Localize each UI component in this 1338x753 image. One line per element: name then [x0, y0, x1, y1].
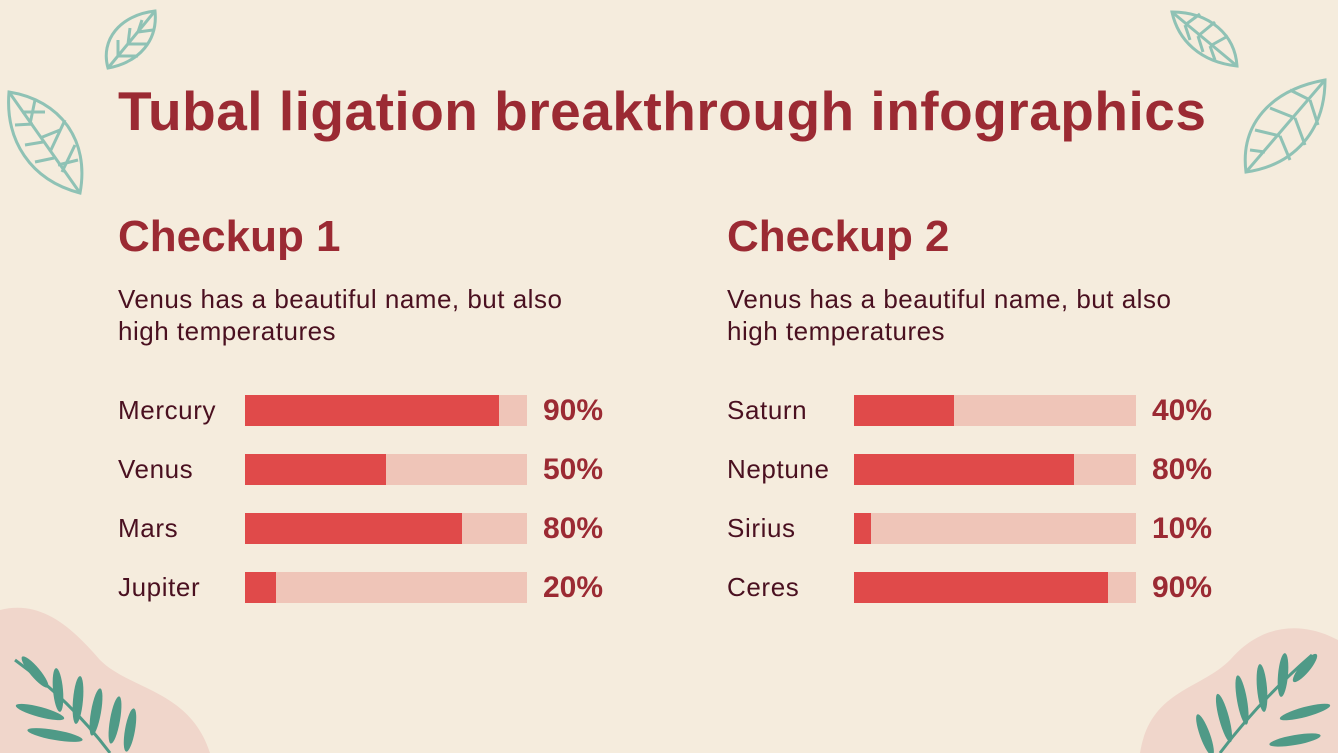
icon: leaf right large [1245, 80, 1325, 172]
panel: checkup 1 [118, 212, 603, 604]
bar: Mars: 80% [543, 512, 603, 545]
bar: Ceres [727, 571, 1212, 604]
description: Venus has a beautiful name, but also high temperatures [727, 284, 1171, 346]
bar: Venus: 50% [543, 453, 603, 486]
bar: Ceres: 90% [1152, 571, 1212, 604]
panel: checkup 2 [727, 212, 1212, 604]
bar: Sirius [727, 512, 1212, 545]
blob bottom right [1140, 628, 1338, 753]
icon: leaf left large [9, 92, 82, 193]
icon: fern bottom left [15, 653, 139, 753]
bar: Jupiter: 20% [543, 571, 603, 604]
heading: Checkup 2 [727, 212, 950, 261]
bar: Saturn: Saturn [727, 395, 807, 425]
bar: Sirius: 10% [1152, 512, 1212, 545]
bar: Jupiter [118, 571, 603, 604]
bar: Neptune: 80% [1152, 453, 1212, 486]
bar: Mercury [118, 394, 603, 427]
bar: Mars: Mars [118, 513, 178, 543]
bar: Jupiter: Jupiter [118, 572, 200, 602]
bar: Mercury: Mercury [118, 395, 216, 425]
bar: Saturn: 40% [1152, 394, 1212, 427]
icon: leaf top right small [1172, 12, 1237, 66]
bar: Venus: Venus [118, 454, 193, 484]
bar: Sirius: Sirius [727, 513, 796, 543]
title: Tubal ligation breakthrough infographics [118, 80, 1206, 142]
icon: fern bottom right [1193, 651, 1331, 753]
bar: Ceres: Ceres [727, 572, 799, 602]
description: Venus has a beautiful name, but also high temperatures [118, 284, 562, 346]
bar: Neptune: Neptune [727, 454, 830, 484]
bar: Neptune [727, 453, 1212, 486]
bar: Venus [118, 453, 603, 486]
blob bottom left [0, 608, 210, 753]
heading: Checkup 1 [118, 212, 341, 261]
icon: leaf top left small [106, 11, 155, 68]
bar: Mars [118, 512, 603, 545]
bar: Saturn [727, 394, 1212, 427]
bar: Mercury: 90% [543, 394, 603, 427]
